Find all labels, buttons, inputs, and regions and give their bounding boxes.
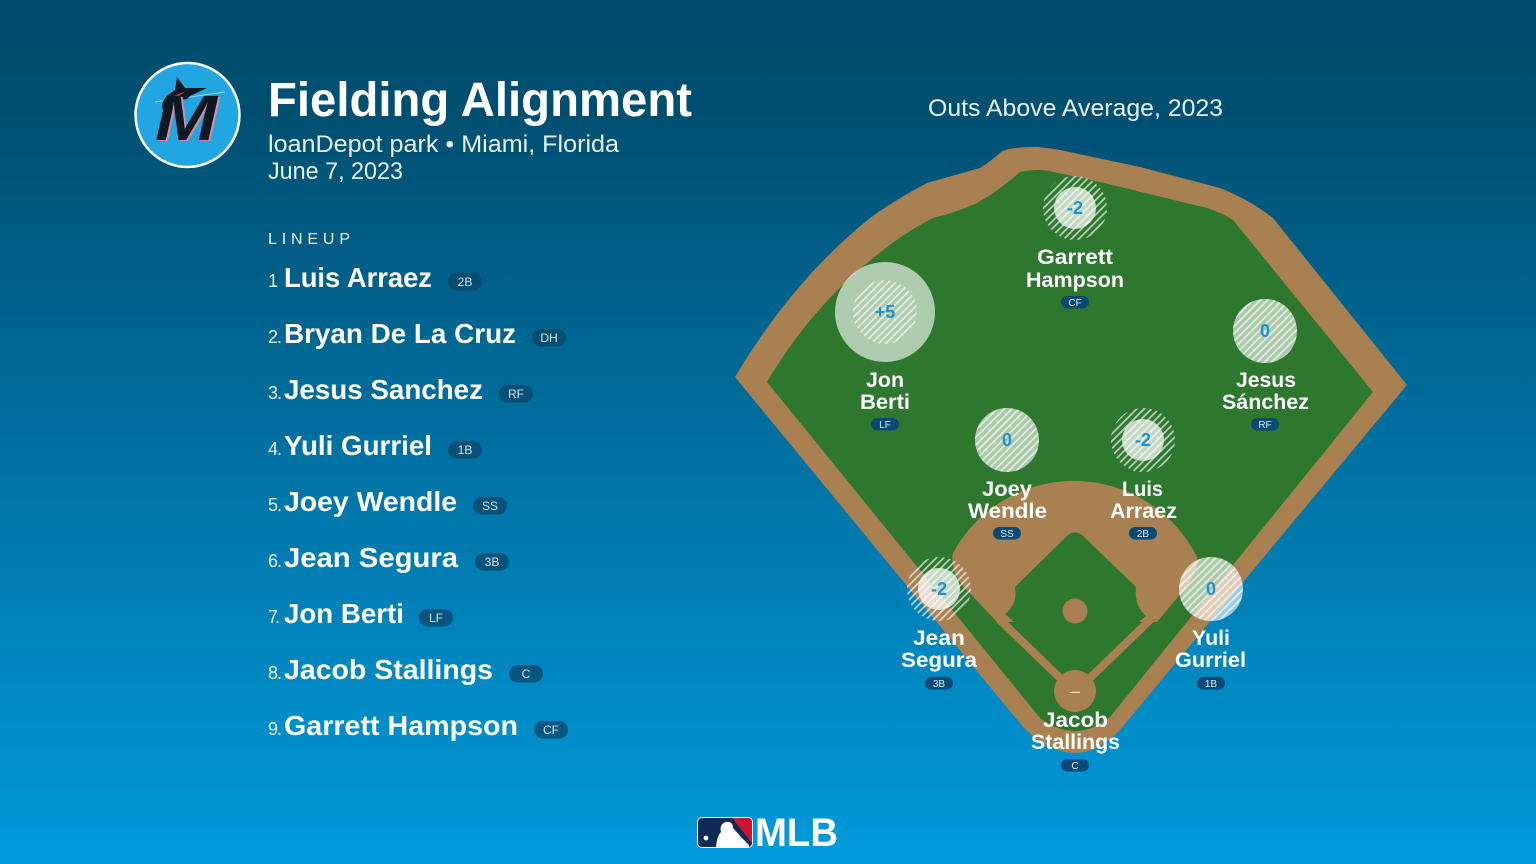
player: Jacob Stallings C: Jacob — [1043, 709, 1108, 732]
player: Jean Segura 3B — [901, 557, 977, 690]
lineup row 9: CF — [543, 723, 559, 737]
lineup row 6: 6. — [268, 551, 282, 571]
player: Yuli Gurriel 1B: Yuli — [1192, 627, 1230, 650]
player: Garrett Hampson CF: Garrett — [1037, 246, 1113, 269]
player: Luis Arraez 2B — [1110, 408, 1177, 540]
player: Yuli Gurriel 1B: 0 — [1206, 579, 1216, 599]
player: Yuli Gurriel 1B: 1B — [1205, 679, 1217, 690]
icon: MLB logo — [697, 817, 836, 848]
lineup row 8: 8. — [268, 663, 282, 683]
lineup row 1: Luis Arraez — [284, 262, 432, 293]
field: pitcher's mound — [1062, 598, 1088, 624]
lineup row 1: 2B — [458, 275, 472, 289]
player: Joey Wendle SS: SS — [1000, 529, 1014, 540]
lineup row 8: Jacob Stallings — [284, 654, 493, 685]
lineup row 5: 5. — [268, 495, 282, 515]
player: Garrett Hampson CF: Hampson — [1026, 269, 1124, 292]
lineup row 7: 7. — [268, 607, 280, 627]
lineup row 3: Jesus Sanchez — [284, 374, 483, 405]
lineup row 2: DH — [540, 331, 558, 345]
title: Fielding Alignment — [268, 74, 692, 127]
field: warning track — [735, 147, 1407, 753]
player: Garrett Hampson CF: CF — [1068, 298, 1082, 309]
player: Jesus Sánchez RF — [1222, 299, 1309, 431]
player: Jon Berti LF — [835, 262, 935, 431]
player: Yuli Gurriel 1B — [1175, 557, 1246, 690]
lineup row 5: SS — [482, 499, 498, 513]
player: Jean Segura 3B: -2 — [931, 579, 947, 599]
player: Jacob Stallings C — [1031, 681, 1120, 772]
player: Luis Arraez 2B: 2B — [1137, 529, 1149, 540]
field: infield grass — [1005, 532, 1146, 673]
player: Luis Arraez 2B: -2 — [1135, 430, 1151, 450]
lineup row 4: 1B — [458, 443, 472, 457]
lineup row 9: Garrett Hampson — [284, 710, 518, 741]
player: Jacob Stallings C: – — [1070, 681, 1080, 701]
lineup row 2: Bryan De La Cruz — [284, 318, 516, 349]
heading: lineup: LINEUP — [268, 231, 350, 248]
chart heading: Outs Above Average: Outs Above Average, 2023 — [928, 95, 1223, 122]
player: Jon Berti LF: LF — [879, 420, 891, 431]
subtitle: venue and date: June 7, 2023 — [268, 158, 403, 185]
player: Jon Berti LF: Berti — [860, 391, 910, 414]
subtitle: venue and date — [268, 131, 620, 185]
icon: MLB logo: MLB — [755, 811, 838, 855]
lineup row 4: Yuli Gurriel — [284, 430, 432, 461]
lineup row 9: 9. — [268, 719, 282, 739]
lineup row 5: Joey Wendle — [284, 486, 457, 517]
baseball field diagram — [735, 147, 1407, 753]
player: Garrett Hampson CF — [1026, 176, 1124, 309]
player: Garrett Hampson CF: -2 — [1067, 198, 1083, 218]
lineup row 7: Jon Berti — [284, 598, 404, 629]
player: Joey Wendle SS: 0 — [1002, 430, 1012, 450]
lineup row 8: C — [522, 667, 531, 681]
lineup list — [268, 262, 568, 741]
lineup row 6: Jean Segura — [284, 542, 458, 573]
lineup row 4: 4. — [268, 439, 282, 459]
icon: Marlins team logo: M — [155, 82, 219, 154]
player: Jesus Sánchez RF: Jesus — [1236, 369, 1296, 392]
icon: Marlins team logo — [136, 63, 240, 167]
icon: Marlins team logo: M — [157, 83, 221, 155]
player: Joey Wendle SS: Joey — [982, 478, 1032, 501]
player: Jean Segura 3B: 3B — [933, 679, 945, 690]
field: baselines — [999, 619, 1151, 678]
player: Jon Berti LF: +5 — [875, 302, 895, 322]
player: Jean Segura 3B: Segura — [901, 649, 977, 672]
lineup row 1: 1. — [268, 271, 278, 291]
player: Jacob Stallings C: C — [1071, 761, 1079, 772]
player: Jesus Sánchez RF: 0 — [1260, 321, 1270, 341]
field: outfield grass — [767, 170, 1373, 731]
lineup row 7 — [268, 598, 453, 629]
field: infield dirt — [952, 481, 1197, 622]
player: Joey Wendle SS — [968, 408, 1047, 540]
lineup row 3: 3. — [268, 383, 282, 403]
player: Joey Wendle SS: Wendle — [968, 500, 1047, 523]
lineup row 7: LF — [429, 611, 443, 625]
player: Jon Berti LF: Jon — [866, 369, 904, 392]
lineup row 6: 3B — [485, 555, 499, 569]
player: Luis Arraez 2B: Luis — [1122, 478, 1163, 501]
player: Jesus Sánchez RF: Sánchez — [1222, 391, 1309, 414]
lineup row 2: 2. — [268, 327, 282, 347]
subtitle: venue and date: loanDepot park • Miami, Florida — [268, 131, 620, 158]
player: Yuli Gurriel 1B: Gurriel — [1175, 649, 1246, 672]
field: home plate circle — [1054, 670, 1096, 712]
player: Jacob Stallings C: Stallings — [1031, 731, 1120, 754]
player: Jean Segura 3B: Jean — [913, 627, 965, 650]
lineup row 3: RF — [508, 387, 524, 401]
player: Luis Arraez 2B: Arraez — [1110, 500, 1177, 523]
lineup row 4 — [268, 430, 482, 461]
lineup row 6 — [268, 542, 509, 573]
player: Jesus Sánchez RF: RF — [1258, 420, 1272, 431]
